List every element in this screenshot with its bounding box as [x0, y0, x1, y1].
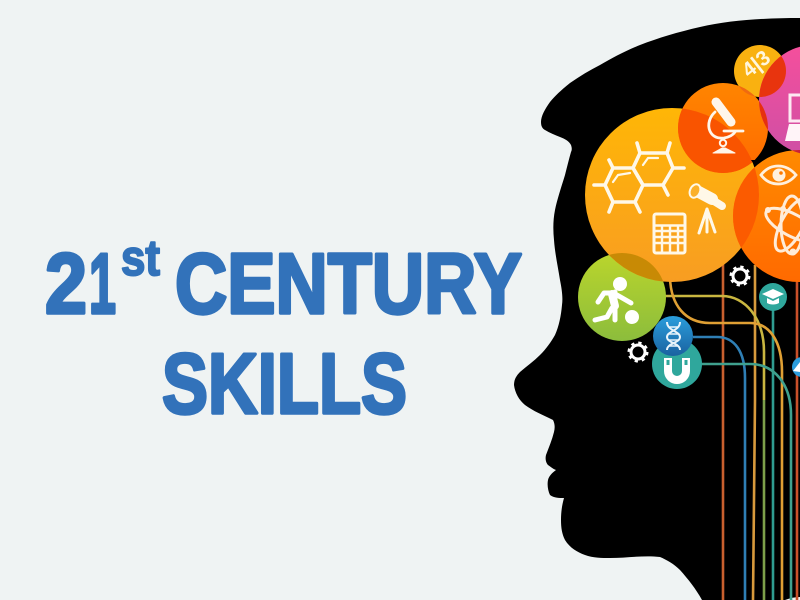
circle: blue edge icon: [792, 357, 800, 377]
circle: 4/3 math: [734, 45, 786, 97]
icon: eye: [761, 166, 796, 184]
head silhouette: [514, 18, 800, 600]
circle: pink computing: [759, 46, 800, 150]
title: 1: [89, 237, 116, 332]
small black gap: [751, 160, 758, 166]
title: [45, 230, 522, 432]
icon: graduation cap: [762, 289, 784, 304]
title: 2: [45, 237, 87, 332]
title: CENTURY: [175, 237, 522, 332]
circle: DNA: [653, 316, 693, 356]
circle: graduation cap: [759, 283, 787, 311]
icon: calculator: [654, 214, 685, 253]
icon: microscope: [709, 102, 743, 153]
connector lines: [664, 260, 797, 600]
icon: magnet: [668, 358, 686, 380]
icon: gear top: [731, 267, 749, 285]
circle: microscope: [678, 83, 768, 173]
icon: fraction 4/3: 4|3: [738, 46, 775, 82]
circle: magnet: [652, 339, 702, 389]
icon: laptop: [785, 95, 800, 141]
icon: gear bottom: [629, 343, 647, 361]
overlap: green with yellow: [609, 253, 664, 282]
circle: yellow science: [585, 108, 754, 282]
title: SKILLS: [162, 337, 407, 432]
icon: hexagon molecule: [594, 143, 684, 212]
icon: DNA helix: [667, 322, 680, 350]
title: st: [121, 230, 160, 286]
icon: atom: [761, 194, 800, 256]
icon: white cloud: [793, 362, 800, 372]
circle: orange physics: [733, 150, 800, 282]
circle: green sports: [578, 253, 666, 341]
icon: telescope: [688, 183, 722, 233]
icon: child kicking ball: [595, 277, 639, 324]
